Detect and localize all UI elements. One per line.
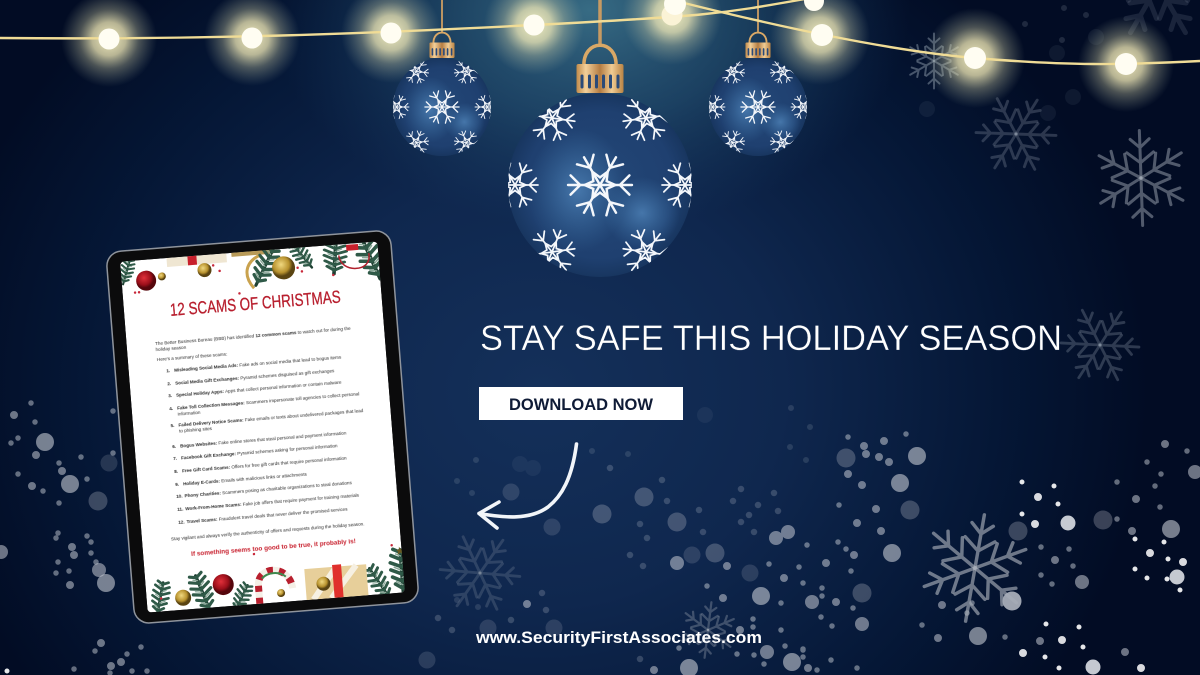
- headline: STAY SAFE THIS HOLIDAY SEASON: [480, 319, 1062, 358]
- ornament: centre bauble: [492, 0, 708, 282]
- document body text: 3. Special Holiday Apps: Apps that collect personal information or contain malware: [168, 380, 342, 398]
- document body text: [155, 325, 373, 542]
- document closing line: If something seems too good to be true, it probably is!: [191, 538, 356, 558]
- tablet screen: [115, 233, 416, 622]
- ornament: left bauble: [384, 0, 500, 159]
- top holiday decorations: [120, 242, 380, 295]
- document body text: Here's a summary of these scams:: [157, 352, 227, 362]
- arrow: [479, 444, 576, 528]
- document body text: The Better Business Bureau (BBB) has identified 12 common scams to watch out for during the: [155, 326, 351, 346]
- download button: DOWNLOAD NOW: [509, 395, 654, 414]
- document title: 12 SCAMS OF CHRISTMAS: [169, 287, 341, 320]
- light glows: [61, 0, 1174, 112]
- bottom holiday decorations: [151, 544, 405, 612]
- document body text: 12. Travel Scams: Fraudulent travel deals that never deliver the promised services: [178, 507, 348, 525]
- document body text: 5. Failed Delivery Notice Scams: Fake emails or texts about undelivered packages that lead: [170, 408, 364, 428]
- document body text: to phishing sites: [179, 426, 213, 434]
- string lights: [0, 0, 1200, 75]
- tablet body: [106, 230, 419, 624]
- document body text: Stay vigilant and always verify the authenticity of offers and requests during the holiday season.: [171, 521, 365, 542]
- tablet mockup: [106, 230, 419, 624]
- document body text: 11. Work-From-Home Scams: Fake job offers that require payment for training materials: [177, 493, 360, 512]
- background snowflakes: [424, 0, 1200, 661]
- document body text: 1. Misleading Social Media Ads: Fake ads on social media that lead to bogus items: [166, 355, 342, 373]
- document body text: 2. Social Media Gift Exchanges: Pyramid schemes disguised as gift exchanges: [167, 368, 335, 386]
- document body text: 10. Phony Charities: Scammers posing as charitable organizations to steal donations: [176, 480, 353, 499]
- document body text: information: [178, 410, 201, 417]
- website url: www.SecurityFirstAssociates.com: [475, 628, 762, 647]
- document body text: 8. Free Gift Card Scams: Offers for free gift cards that require personal information: [174, 455, 347, 474]
- document body text: holiday season: [155, 345, 187, 352]
- document body text: 4. Fake Toll Collection Messages: Scammers impersonate toll agencies to collect personal: [169, 391, 359, 411]
- document body text: 6. Bogus Websites: Fake online stores that steal personal and payment information: [172, 430, 347, 449]
- ornament: right bauble: [700, 0, 816, 159]
- download button: [479, 387, 683, 420]
- document body text: 9. Holiday E-Cards: Emails with malicious links or attachments: [175, 472, 308, 487]
- document body text: 7. Facebook Gift Exchange: Pyramid schemes asking for personal information: [173, 443, 338, 461]
